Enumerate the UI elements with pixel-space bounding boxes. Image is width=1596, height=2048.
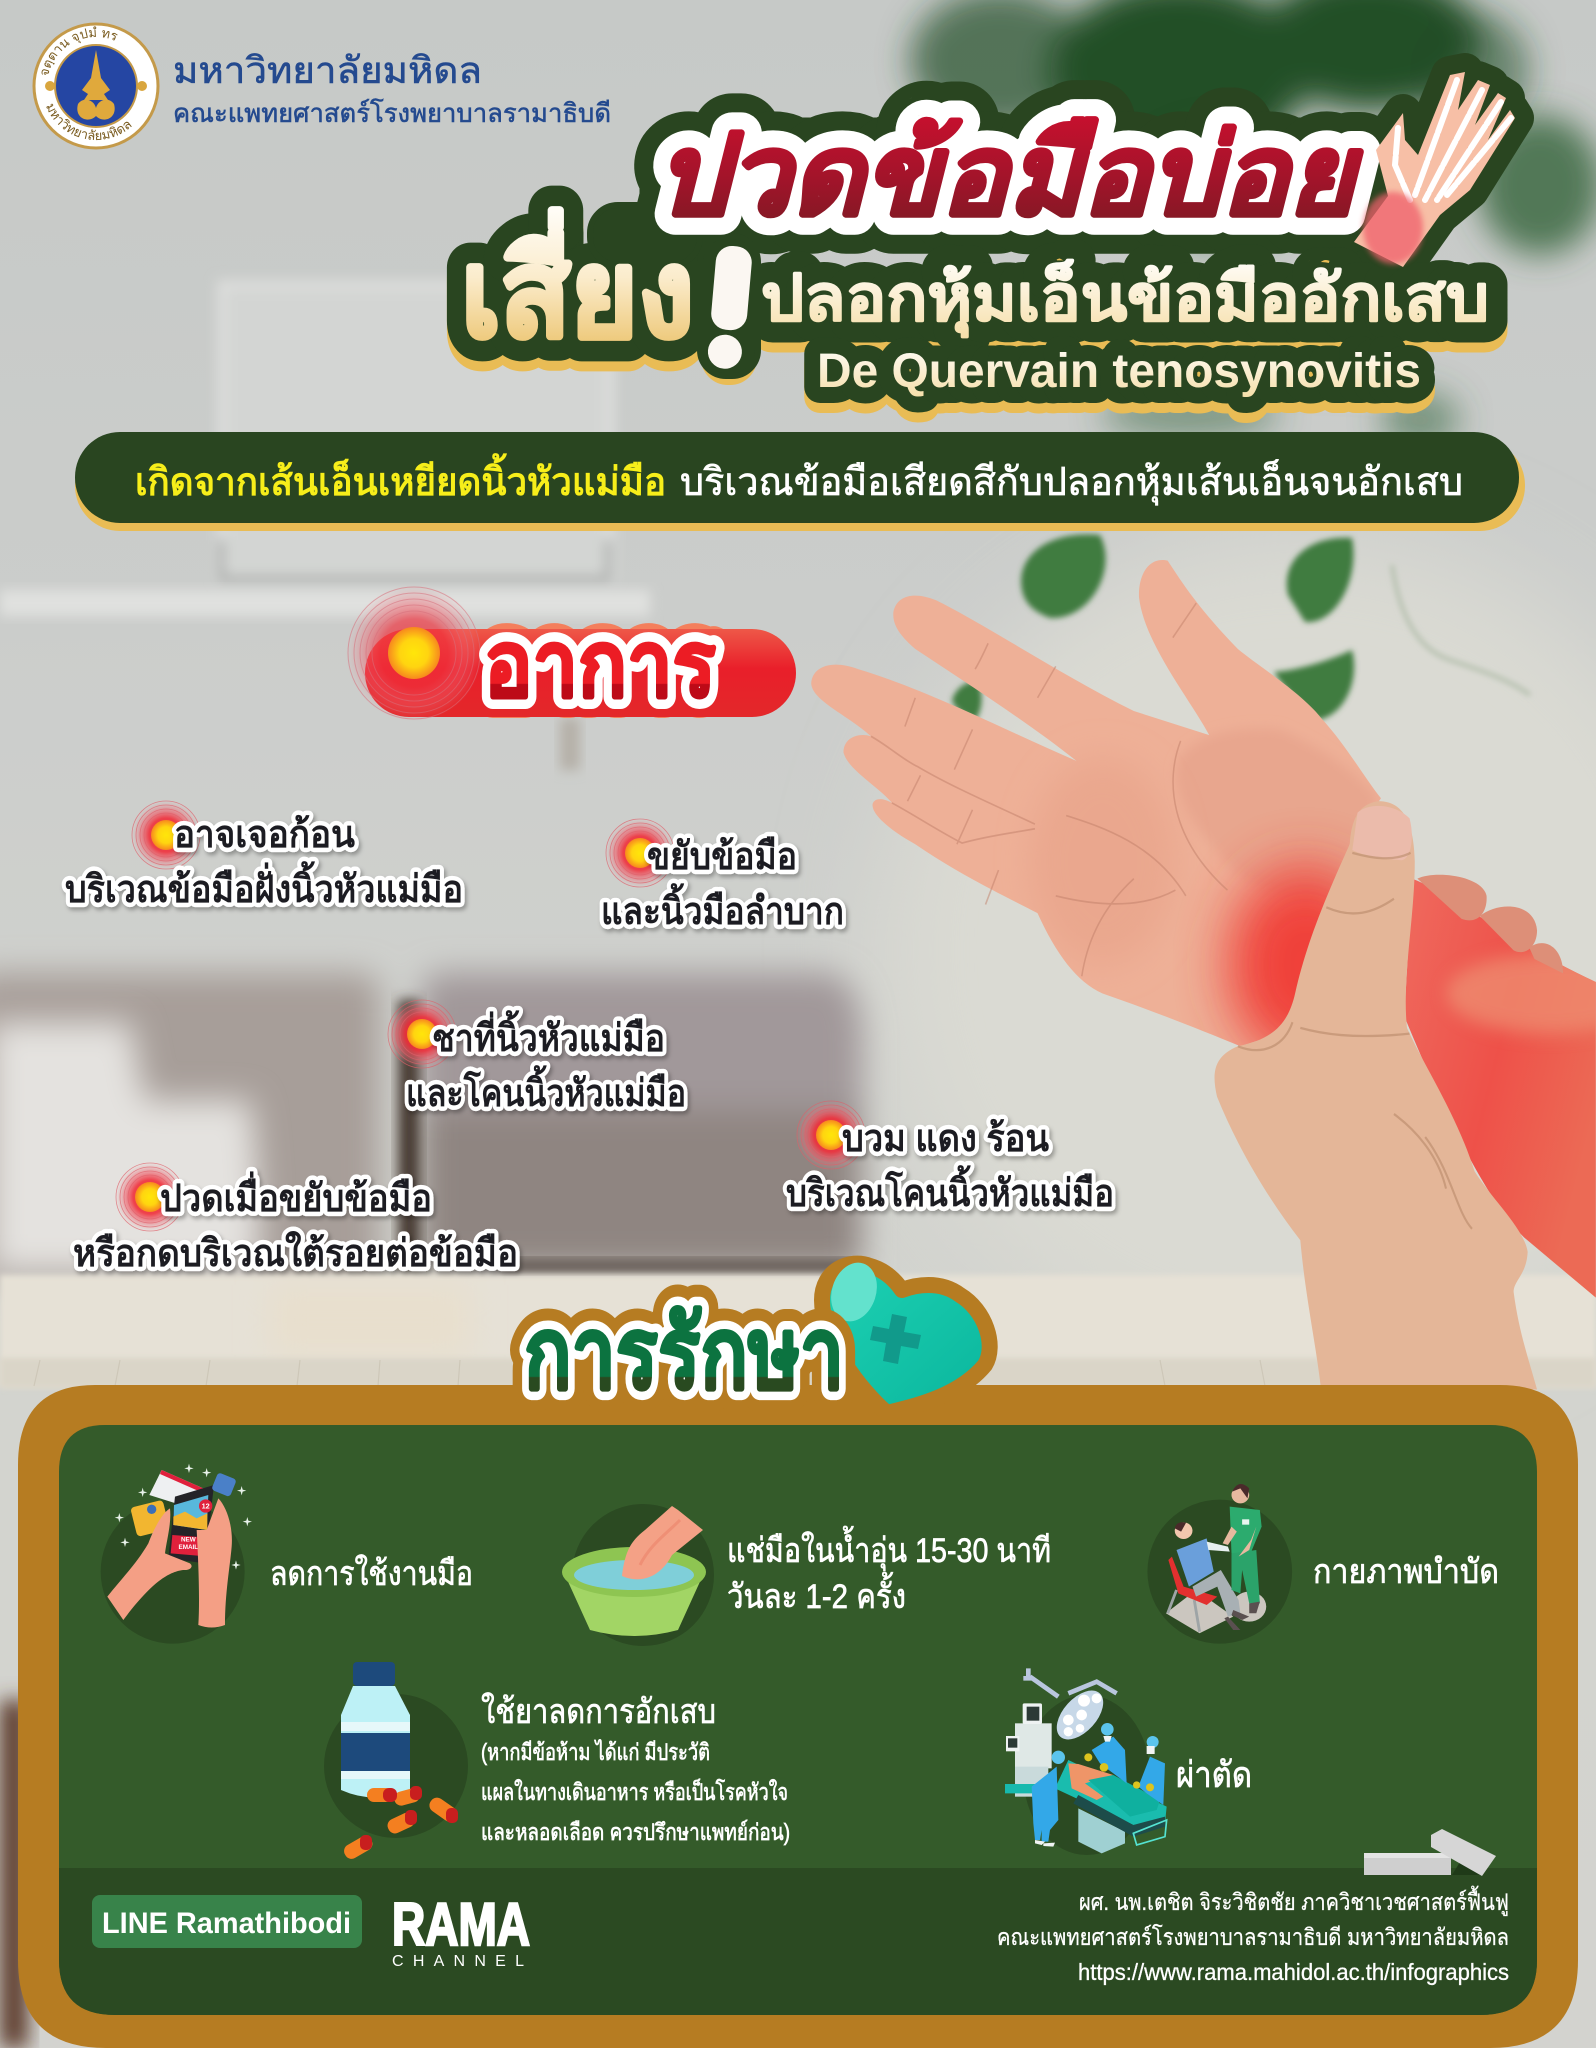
treatment: warm soak: แช่มือในน้ำอุ่น 15-30 นาที: [727, 1526, 1051, 1571]
heading text: อาการ: [484, 614, 716, 716]
treatment: reduce hand use: ลดการใช้งานมือ: [270, 1554, 473, 1593]
symptom: lump: อาจเจอก้อน: [174, 814, 355, 856]
treatment: reduce hand use: [101, 1464, 473, 1644]
symptom: pain: ปวดเมื่อขยับข้อมือ: [160, 1171, 432, 1220]
treatment: medication: และหลอดเลือด ควรปรึกษาแพทย์ก่อน): [481, 1819, 790, 1845]
title dark outline layer: ปวดข้อมือบ่อย: [656, 113, 1362, 238]
title gold shadow layer: De Quervain tenosynovitis: [817, 355, 1421, 408]
logo: Mahidol University seal: มหาวิทยาลัยมหิดล: [46, 104, 132, 140]
heading: treatment: การรักษา: [524, 1298, 844, 1410]
symptom: swelling: [786, 1101, 1114, 1215]
heading red pill: [365, 629, 796, 717]
symptom: numbness: [388, 1000, 686, 1115]
credits: ผศ. นพ.เตชิต จิระวิชิตชัย ภาควิชาเวชศาสตร์ฟื้นฟู: [1079, 1886, 1509, 1916]
icon: phone in hands: 12: [202, 1502, 210, 1511]
heading: treatment: การรักษา: [524, 1298, 844, 1410]
icon: open box: [1364, 1829, 1496, 1876]
icon: heart with cross: [822, 1257, 990, 1413]
open hand: [811, 560, 1381, 1046]
logo: RAMA Channel: CHANNEL: [392, 1953, 524, 1970]
logo: RAMA Channel: [392, 1891, 530, 1970]
title dark outline layer: [461, 113, 1489, 398]
heading: treatment: การรักษา: [524, 1298, 844, 1410]
icon: phone in hands: EMAIL: [178, 1544, 198, 1551]
blurred plant: [910, 0, 1530, 160]
vine leaves: [952, 534, 1354, 720]
icon: phone in hands: [101, 1464, 252, 1644]
far-side fingers: [1417, 875, 1563, 973]
icon: hand x-ray: [1354, 72, 1515, 267]
treatment: medication: [324, 1662, 790, 1861]
title block: [461, 113, 1489, 408]
treatment: medication: ใช้ยาลดการอักเสบ: [481, 1692, 716, 1731]
treatment: physiotherapy: กายภาพบำบัด: [1313, 1553, 1499, 1591]
symptom: stiffness: ขยับข้อมือ: [647, 836, 797, 878]
heading: symptoms: [346, 585, 796, 721]
treatment: medication: แผลในทางเดินอาหาร หรือเป็นโรคหัวใจ: [481, 1777, 788, 1805]
badge: LINE Ramathibodi: [92, 1895, 362, 1948]
icon: phone in hands: NEW: [181, 1537, 196, 1544]
gripping hand: [1215, 801, 1537, 1390]
title gold shadow layer: ปลอกหุ้มเอ็นข้อมืออักเสบ: [761, 270, 1489, 348]
main title line 1: ปวดข้อมือบ่อย: [656, 113, 1362, 238]
red forearm: [1404, 879, 1596, 1298]
treatment: medication: (หากมีข้อห้าม ได้แก่ มีประวัติ: [481, 1739, 710, 1765]
logo: Mahidol University seal: จตฺตาน จุปมํ ทร: [42, 26, 118, 75]
symptom: swelling: บวม แดง ร้อน: [842, 1118, 1049, 1160]
icon: pill bottle: [324, 1662, 468, 1861]
icon: operating room: [1005, 1668, 1167, 1855]
symptom: stiffness: [601, 819, 844, 933]
treatment: warm soak: [562, 1504, 1051, 1646]
treatment: warm soak: วันละ 1-2 ครั้ง: [727, 1572, 906, 1616]
panel: treatment: [18, 1385, 1578, 2048]
banner: cause: เกิดจากเส้นเอ็นเหยียดนิ้วหัวแม่มือ: [135, 453, 666, 504]
university name: [173, 50, 611, 128]
treatment: physiotherapy: [1147, 1484, 1499, 1644]
footer band: [59, 1868, 1537, 2015]
treatment: surgery: ผ่าตัด: [1176, 1754, 1252, 1795]
symptom: numbness: ชาที่นิ้วหัวแม่มือ: [432, 1010, 665, 1060]
title gold shadow layer: [461, 218, 1489, 408]
university name: คณะแพทยศาสตร์โรงพยาบาลรามาธิบดี: [173, 98, 611, 128]
icon: therapist and patient: [1147, 1484, 1292, 1644]
hand photo illustration: [811, 560, 1596, 1390]
blurred table: [0, 1275, 1596, 1387]
title dark outline layer: ปลอกหุ้มเอ็นข้อมืออักเสบ: [761, 260, 1489, 338]
symptom: numbness: และโคนนิ้วหัวแม่มือ: [406, 1065, 686, 1115]
title dark outline layer: De Quervain tenosynovitis: [817, 345, 1421, 398]
logo: RAMA Channel: RAMA: [392, 1891, 530, 1958]
blurred wall frame: [222, 285, 610, 578]
symptom: pain: หรือกดบริเวณใต้รอยต่อข้อมือ: [73, 1231, 518, 1275]
english term: De Quervain tenosynovitis: [817, 345, 1421, 398]
logo: Mahidol University seal: [32, 22, 160, 150]
banner: cause: บริเวณข้อมือเสียดสีกับปลอกหุ้มเส้นเอ็นจนอักเสบ: [680, 458, 1463, 506]
title: risk word: เสี่ยง: [461, 208, 694, 362]
credits: คณะแพทยศาสตร์โรงพยาบาลรามาธิบดี มหาวิทยาลัยมหิดล: [997, 1924, 1509, 1950]
symptom: lump: บริเวณข้อมือฝั่งนิ้วหัวแม่มือ: [65, 861, 463, 911]
heading orange halo: อาการ: [484, 614, 716, 716]
title line 2: ปลอกหุ้มเอ็นข้อมืออักเสบ: [761, 260, 1489, 338]
red target bullet: [346, 585, 482, 721]
banner: cause: [75, 432, 1525, 531]
title gold shadow layer: เสี่ยง: [461, 218, 694, 372]
treatment: surgery: [1005, 1668, 1252, 1855]
main title line 1: ปวดข้อมือบ่อย: [656, 113, 1362, 238]
heading text: อาการ: [484, 614, 716, 716]
badge: LINE Ramathibodi: LINE Ramathibodi: [102, 1907, 351, 1940]
symptom: lump: [65, 801, 463, 911]
icon: hand x-ray backing: [1354, 72, 1515, 267]
symptom: pain: [73, 1163, 518, 1275]
credits: [997, 1886, 1509, 1985]
symptom: stiffness: และนิ้วมือลำบาก: [601, 883, 844, 933]
university name: มหาวิทยาลัยมหิดล: [173, 50, 482, 91]
exclamation mark: [706, 245, 753, 370]
symptom: swelling: บริเวณโคนนิ้วหัวแม่มือ: [786, 1165, 1114, 1215]
title dark outline layer: เสี่ยง: [461, 208, 694, 362]
blurred sofa: [0, 973, 862, 1283]
credits: https://www.rama.mahidol.ac.th/infographics: [1078, 1959, 1509, 1985]
icon: basin: [562, 1504, 714, 1646]
